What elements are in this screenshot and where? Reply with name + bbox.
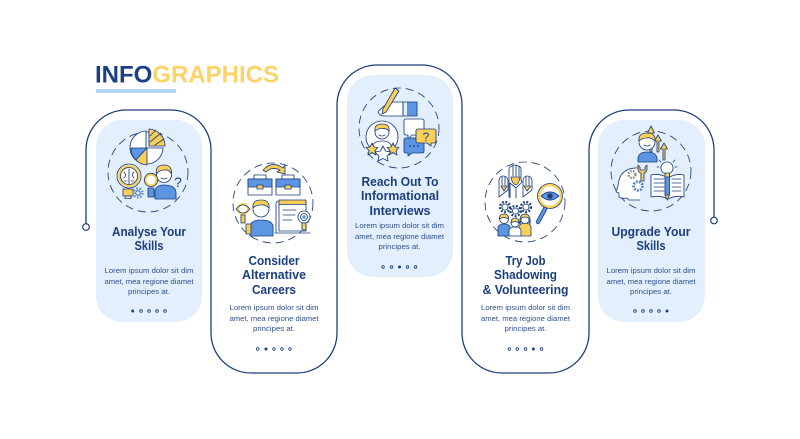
panel: upgrade your skills <box>606 126 696 312</box>
connecting outline <box>83 65 717 373</box>
body text: Lorem ipsum dolor sit dim <box>104 266 194 275</box>
page dots <box>256 348 291 350</box>
body text: principes at. <box>504 324 546 333</box>
heading <box>112 224 186 253</box>
heading: Consider <box>248 253 300 268</box>
heading: Skills <box>636 238 666 253</box>
icon: writing hand, person with stars and chat bubbles: ? <box>423 130 430 144</box>
body text: amet, mea regione diamet <box>481 314 571 323</box>
heading: & Volunteering <box>482 282 569 297</box>
body text <box>355 221 445 251</box>
body text: principes at. <box>630 287 672 296</box>
body text: principes at. <box>253 324 295 333</box>
heading: Analyse Your <box>112 224 186 239</box>
page dots <box>634 310 668 312</box>
body text <box>606 266 696 296</box>
title: INFOGRAPHICS <box>95 62 279 88</box>
heading: Try Job <box>506 253 546 268</box>
heading <box>612 224 690 253</box>
panel backgrounds <box>96 75 705 322</box>
body text: amet, mea regione diamet <box>355 232 445 241</box>
heading: Shadowing <box>494 267 557 282</box>
heading: Alternative <box>242 267 306 282</box>
icon: person with arrows, head with gears and open book <box>611 126 691 211</box>
body text: amet, mea regione diamet <box>606 277 696 286</box>
panel: reach out to informational interviews <box>355 88 445 268</box>
heading: Reach Out To <box>362 174 439 189</box>
heading: Upgrade Your <box>612 224 690 239</box>
icon: writing hand, person with stars and chat bubbles <box>359 88 439 168</box>
heading: Skills <box>134 238 164 253</box>
body text <box>481 303 571 333</box>
body text: principes at. <box>128 287 170 296</box>
body text: Lorem ipsum dolor sit dim <box>230 303 318 312</box>
panel: try job shadowing and volunteering <box>481 162 571 350</box>
body text: Lorem ipsum dolor sit dim <box>481 303 570 312</box>
heading <box>361 174 439 218</box>
heading: Careers <box>252 282 296 297</box>
heading: Interviews <box>370 203 430 218</box>
heading: Informational <box>361 188 439 203</box>
heading <box>242 253 306 297</box>
icon: pie chart, brain bulb and person: ? <box>174 174 182 190</box>
icon: raised hands, gears, team and magnifier <box>485 162 565 242</box>
icon: briefcases, person and certificate <box>233 163 313 243</box>
panel: analyse your skills <box>104 129 194 312</box>
panel: consider alternative careers <box>230 163 319 350</box>
body text: Lorem ipsum dolor sit dim <box>606 266 696 275</box>
body text: Lorem ipsum dolor sit dim <box>355 221 444 230</box>
body text: amet, mea regione diamet <box>230 314 319 323</box>
page dots <box>131 310 166 312</box>
body text <box>104 266 194 296</box>
page dots <box>382 266 417 268</box>
body text: amet, mea regione diamet <box>104 277 194 286</box>
page dots <box>508 348 543 350</box>
body text <box>230 303 319 333</box>
icon: pie chart, brain bulb and person <box>108 129 188 212</box>
heading <box>482 253 569 297</box>
body text: principes at. <box>378 242 420 251</box>
